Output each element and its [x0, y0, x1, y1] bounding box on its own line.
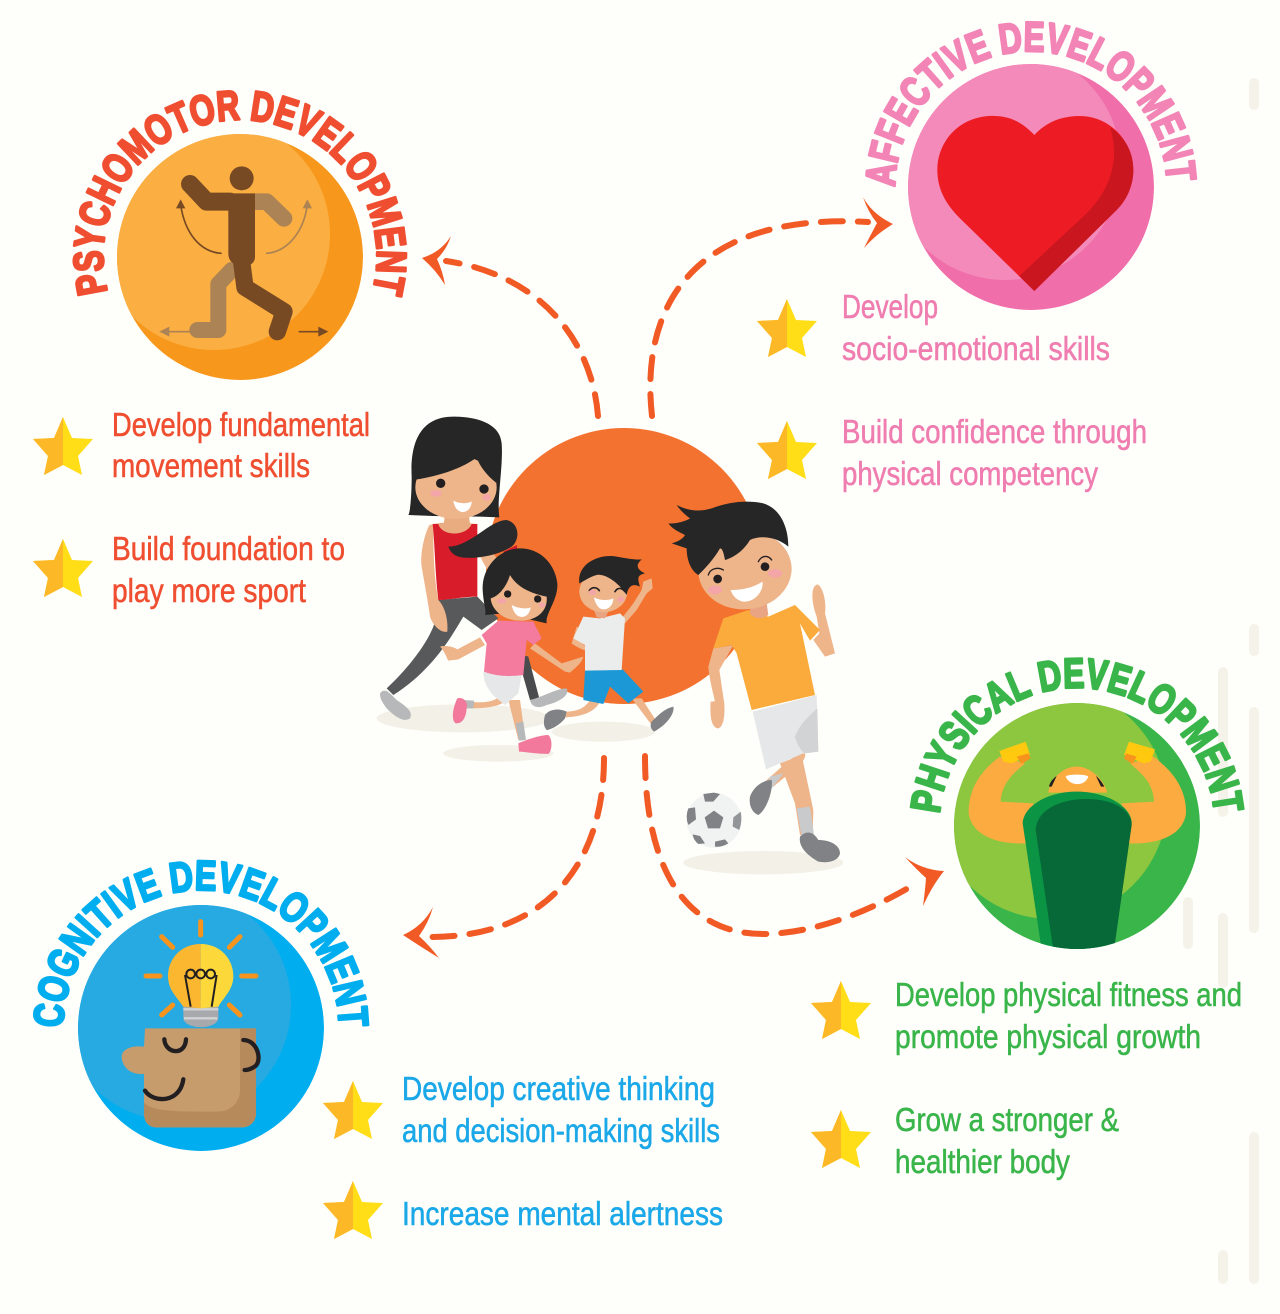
- girl: [440, 520, 583, 754]
- text: cognitive benefits: Increase mental alertness: [402, 1195, 723, 1232]
- text: psychomotor benefits: play more sport: [112, 572, 306, 609]
- stars: [811, 981, 871, 1168]
- central orange circle: [486, 428, 762, 704]
- text: psychomotor benefits: movement skills: [112, 447, 310, 484]
- arrow: to affective development: [650, 197, 893, 416]
- text: affective benefits: [842, 288, 1147, 492]
- text: psychomotor benefits: [112, 406, 370, 609]
- text: physical benefits: promote physical growth: [895, 1018, 1201, 1055]
- mother: [380, 417, 567, 720]
- panel: cognitive development: [33, 860, 723, 1239]
- heading: physical: PHYSICAL DEVELOPMENT: [910, 657, 1245, 813]
- heading: psychomotor: PSYCHOMOTOR DEVELOPMENT: [72, 90, 408, 298]
- family illustration: [377, 417, 843, 874]
- text: psychomotor benefits: Develop fundamental: [112, 406, 370, 443]
- arrow: to physical development: [645, 756, 944, 934]
- text: cognitive benefits: [402, 1070, 723, 1232]
- heading: cognitive: COGNITIVE DEVELOPMENT: [33, 860, 370, 1027]
- ground shadows: [377, 704, 843, 874]
- stars: [33, 417, 93, 597]
- heading: affective: AFFECTIVE DEVELOPMENT: [865, 20, 1198, 188]
- stars: [323, 1081, 383, 1239]
- text: psychomotor benefits: Build foundation to: [112, 530, 345, 567]
- icon: moving figure: [117, 134, 363, 380]
- text: affective benefits: Build confidence through: [842, 413, 1147, 450]
- panel: psychomotor development: [33, 90, 408, 610]
- icon: strong man: [954, 703, 1200, 949]
- arrow: to psychomotor development: [422, 236, 598, 416]
- text: physical benefits: [895, 976, 1242, 1180]
- text: affective benefits: socio-emotional skills: [842, 330, 1110, 367]
- text: affective benefits: Develop: [842, 288, 938, 325]
- text: physical benefits: Grow a stronger &: [895, 1101, 1119, 1138]
- arrow: to cognitive development: [403, 758, 604, 958]
- panel: physical development: [811, 657, 1245, 1180]
- small boy: [544, 556, 674, 732]
- stars: [757, 299, 817, 479]
- text: cognitive benefits: and decision-making skills: [402, 1112, 720, 1149]
- panel: affective development: [757, 20, 1198, 492]
- icon: heart: [908, 64, 1154, 310]
- text: physical benefits: healthier body: [895, 1143, 1070, 1180]
- text: cognitive benefits: Develop creative thinking: [402, 1070, 715, 1107]
- icon: head with light bulb: [78, 905, 324, 1151]
- big boy with football: [668, 502, 840, 862]
- text: affective benefits: physical competency: [842, 455, 1098, 492]
- football: [687, 793, 741, 848]
